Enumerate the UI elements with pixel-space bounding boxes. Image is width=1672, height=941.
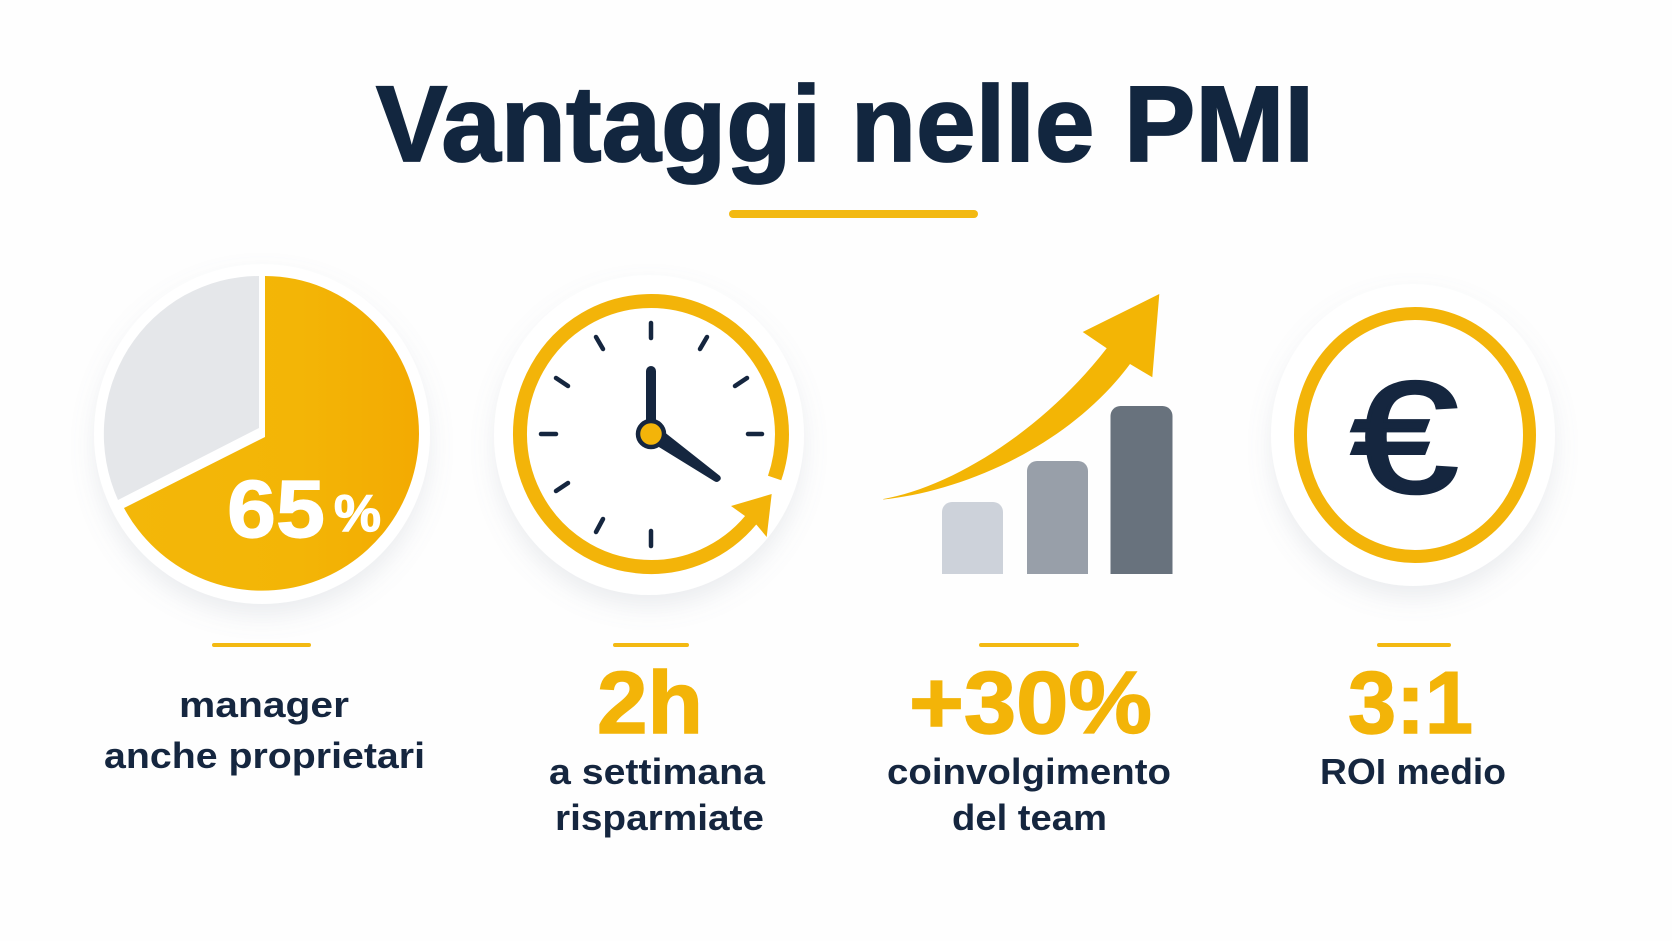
caption: +30%: coinvolgimento — [887, 751, 1171, 792]
euro backing disc — [1271, 284, 1555, 586]
growth arrow — [883, 294, 1159, 500]
panel: clock icon — [494, 275, 804, 595]
clock ring with arrow — [520, 301, 782, 567]
bar 2 — [1027, 461, 1088, 574]
pie backing disc — [94, 264, 430, 604]
caption: 65% — [104, 643, 425, 776]
caption: 65%: manager — [179, 684, 349, 725]
pie value: % — [334, 485, 381, 543]
caption: +30%: +30% — [909, 653, 1152, 752]
clock hands — [638, 371, 721, 482]
euro symbol: € — [1351, 350, 1458, 526]
caption: +30% — [887, 643, 1171, 838]
title underline — [729, 210, 978, 218]
caption: 3:1: ROI medio — [1320, 751, 1506, 792]
caption: 2h: risparmiate — [555, 797, 764, 838]
panel: pie chart 65% — [94, 264, 430, 604]
clock backing disc — [494, 275, 804, 595]
caption: +30%: del team — [952, 797, 1107, 838]
title: Vantaggi nelle PMI — [376, 63, 1314, 184]
caption: 3:1 — [1320, 643, 1506, 792]
pie slice: remaining share — [104, 276, 259, 500]
clock tick marks — [541, 323, 762, 546]
panel: growth chart — [883, 294, 1172, 574]
bar 1 — [942, 502, 1003, 574]
caption: 2h — [549, 643, 766, 838]
caption: 3:1: 3:1 — [1348, 653, 1473, 752]
bar 3 — [1110, 406, 1172, 574]
caption: 2h: a settimana — [549, 751, 766, 792]
euro ring — [1300, 314, 1530, 556]
panel: euro icon — [1271, 284, 1555, 586]
pie value: 65 — [227, 464, 325, 555]
pie value — [227, 464, 381, 555]
pie slice: 65 percent — [124, 276, 419, 591]
caption: 65%: anche proprietari — [104, 735, 425, 776]
caption: 2h: 2h — [597, 653, 703, 752]
